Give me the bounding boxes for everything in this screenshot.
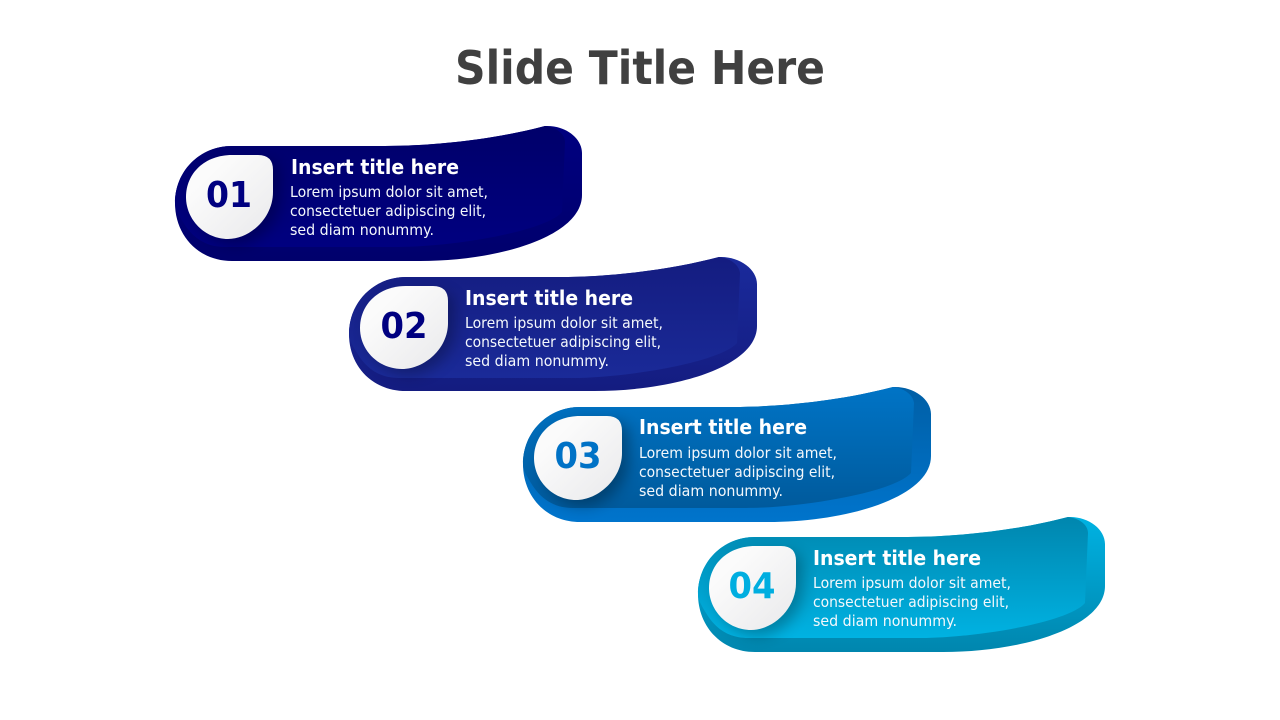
badge: 03: 03 <box>554 436 602 477</box>
card text: 03: Lorem ipsum dolor sit amet, <box>639 444 837 462</box>
badge: 01: 01 <box>206 175 252 216</box>
panel front face: step 01 <box>175 126 565 247</box>
card text: 02: consectetuer adipiscing elit, <box>465 333 661 351</box>
card text: 02 <box>465 286 663 370</box>
card text: 02: Lorem ipsum dolor sit amet, <box>465 314 663 332</box>
card text: 01: sed diam nonummy. <box>290 221 434 239</box>
card text: 04: sed diam nonummy. <box>813 612 957 630</box>
panel front face: step 02 <box>349 257 740 378</box>
badge: 03 <box>534 416 629 506</box>
card text: 03: consectetuer adipiscing elit, <box>639 463 835 481</box>
panel: step 04 <box>698 517 1105 652</box>
badge: 01 <box>186 155 280 245</box>
card text: 04 <box>813 546 1011 630</box>
panel body side: step 04 <box>698 517 1105 652</box>
title: Slide Title Here <box>455 41 825 95</box>
panel: step 01 <box>175 126 582 261</box>
badge: 02: 02 <box>380 306 428 347</box>
card text: 02: Insert title here <box>465 286 633 310</box>
card text: 03: sed diam nonummy. <box>639 482 783 500</box>
card text: 04: Insert title here <box>813 546 981 570</box>
badge: 04: 04 <box>728 566 776 607</box>
card text: 01: Insert title here <box>291 155 459 179</box>
card text: 04: consectetuer adipiscing elit, <box>813 593 1009 611</box>
card text: 01: consectetuer adipiscing elit, <box>290 202 486 220</box>
panel body side: step 03 <box>523 387 931 522</box>
badge: 02 <box>360 286 455 375</box>
card text: 04: Lorem ipsum dolor sit amet, <box>813 574 1011 592</box>
panel body side: step 02 <box>349 257 757 391</box>
card text: 01 <box>290 155 488 239</box>
card text: 01: Lorem ipsum dolor sit amet, <box>290 183 488 201</box>
card text: 02: sed diam nonummy. <box>465 352 609 370</box>
panel: step 03 <box>523 387 931 522</box>
panel front face: step 04 <box>698 517 1088 638</box>
panel front face: step 03 <box>523 387 914 508</box>
card text: 03: Insert title here <box>639 415 807 439</box>
badge: 04 <box>709 546 803 636</box>
panel: step 02 <box>349 257 757 391</box>
panel body side: step 01 <box>175 126 582 261</box>
card text: 03 <box>639 415 837 500</box>
